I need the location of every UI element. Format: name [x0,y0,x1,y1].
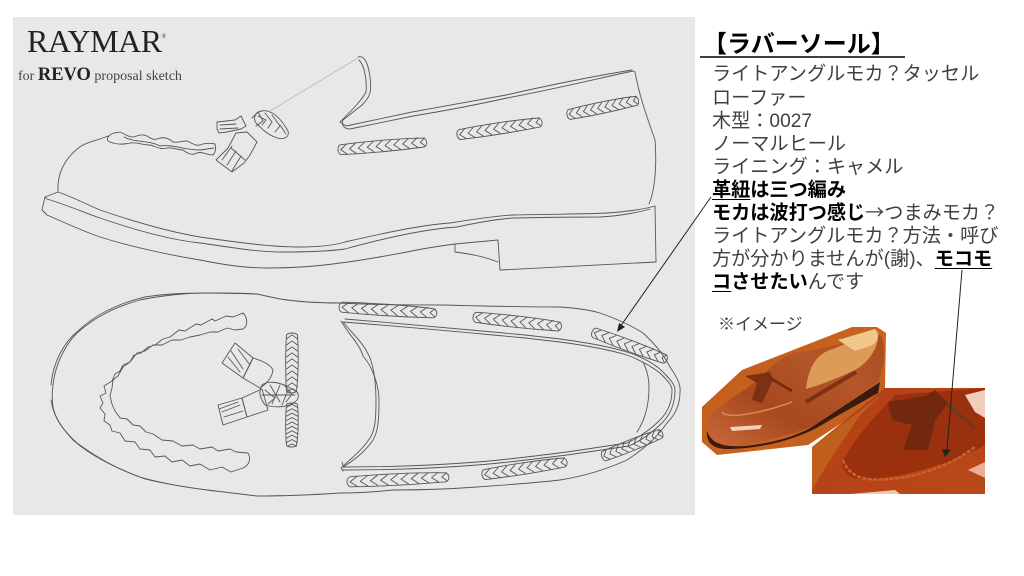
bottom braid 3 [600,427,664,462]
spec text block: 方が分かりませんが(謝)、モコモ [712,249,992,270]
bottom braid 1 [347,471,449,488]
top braid 2 [472,311,562,332]
title underline [700,56,905,58]
spec text block: 革紐は三つ編み [712,180,846,201]
spec text block: モカは波打つ感じ→つまみモカ？ [712,197,999,225]
top braid 1 [339,301,437,319]
wavy moccasin seam [107,132,216,155]
heading: rubber sole: 【ラバーソール】 [703,31,895,58]
top view knot [260,382,298,407]
side braid 2 [456,116,543,141]
stitched moccasin seam [843,447,975,480]
side braid [806,372,856,402]
lining line [343,322,672,467]
spec text block: ノーマルヒール [712,134,846,155]
top braid 3 [590,327,669,365]
shoe sole [707,382,880,449]
arrow: moccasin callout [942,270,962,457]
side view shoe sketch [42,57,656,270]
close-up tassels [888,390,948,450]
tassels and knot [216,111,288,172]
arrow: braid callout [617,197,711,332]
sole lines [45,192,655,247]
photo: moccasin closeup [812,388,985,494]
spec text block: ライニング：キャメル [712,157,903,178]
wood corner [812,392,885,490]
photo: full shoe [702,327,886,455]
shoe opening and tree [806,331,878,389]
vamp U line [342,322,376,466]
spec text block: コさせたいんです [712,272,864,293]
spec text block: ライトアングルモカ？方法・呼び [712,226,998,247]
spec text block: 木型：0027 [712,111,812,132]
logo: RAYMAR: RAYMAR® [27,23,166,59]
bottom braid 2 [481,456,568,481]
collar topline [342,57,635,129]
side braid 1 [337,136,427,156]
top tassel lower [218,398,247,425]
heel seam [637,362,649,432]
highlight [730,425,762,431]
subtitle: for REVO proposal sketch: for REVO proposal sketch [18,65,182,85]
close-up lace [948,405,975,428]
wavy toe seam [100,313,250,472]
shoe upper outline [58,136,108,191]
side braid 3 [566,94,640,121]
top view shoe sketch [51,293,680,496]
top vertical braid lower [286,403,298,447]
highlight [965,390,985,418]
spec text block [712,64,999,293]
heel block [455,206,656,270]
spec text block: ローファー [712,88,807,109]
vamp [842,388,985,479]
spec text block: ライトアングルモカ？タッセル [712,64,979,85]
tassel [745,372,773,403]
toe seam [722,402,792,415]
shoe upper [708,335,884,445]
top vertical braid upper [286,333,298,393]
panel: sketch background [13,17,695,515]
top tassel upper [222,343,253,378]
image caption: ※イメージ [718,315,803,334]
lace [770,378,792,391]
outer outline [52,293,680,496]
heel counter [635,72,656,204]
